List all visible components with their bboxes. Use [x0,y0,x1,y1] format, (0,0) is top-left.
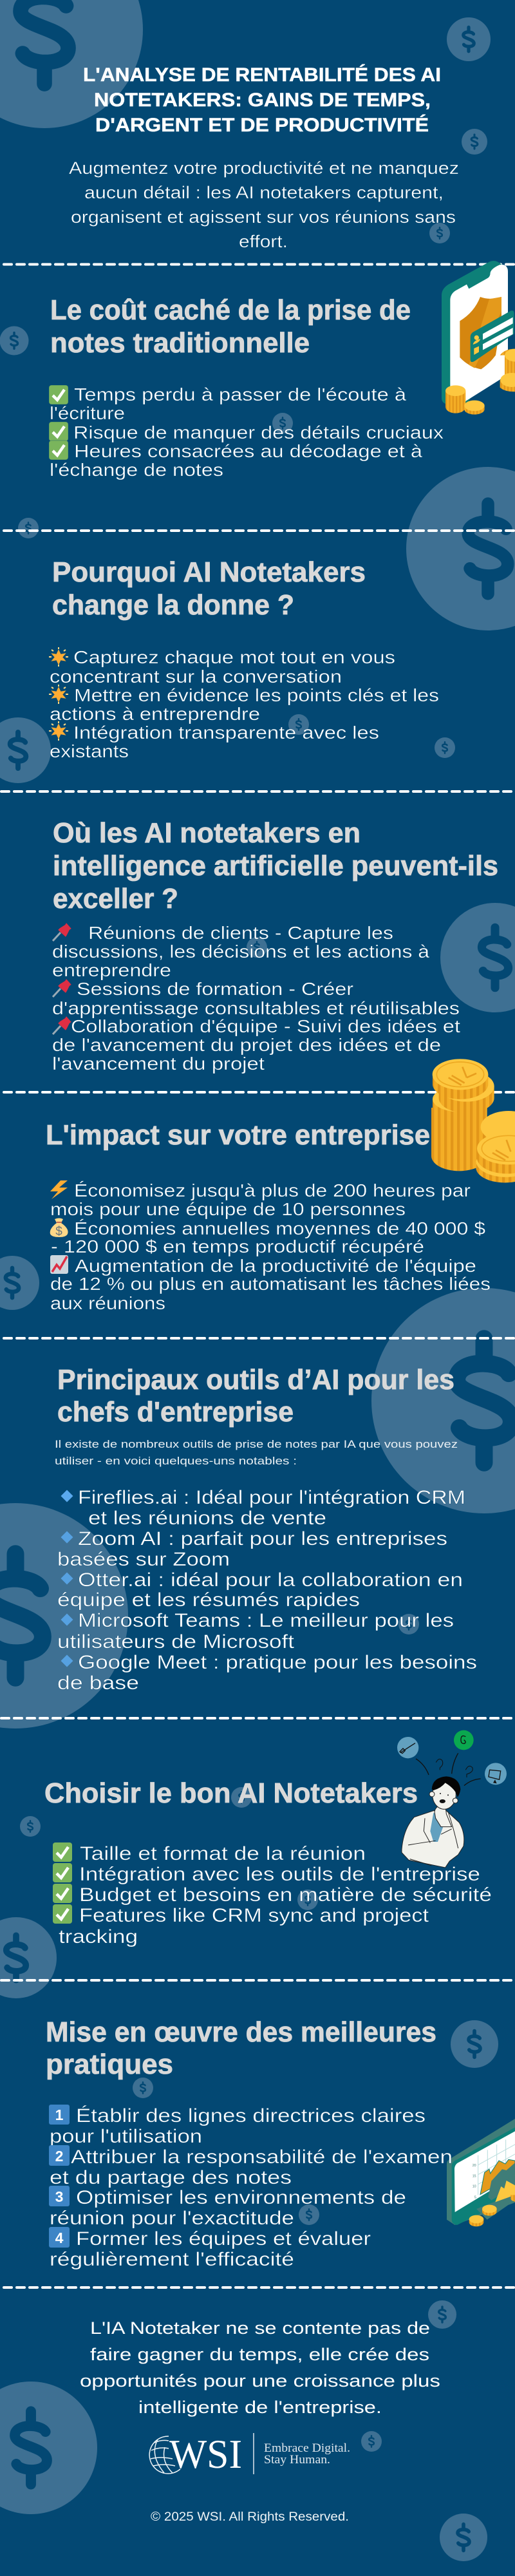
section 4 list: - 120 000 $ en temps productif récupéré [51,1236,424,1256]
section 5 list: et les réunions de vente [88,1508,326,1529]
section 2 list: existants [50,741,129,761]
section 5 intro: utiliser - en voici quelques-uns notables : [55,1455,297,1467]
closing statement: L'IA Notetaker ne se contente pas de [90,2318,430,2338]
section 4 list: Augmentation de la productivité de l'équipe [75,1256,476,1276]
section 7 list: Optimiser les environnements de [76,2187,406,2208]
subtitle: organisent et agissent sur vos réunions sans [71,207,456,227]
section 5 list: de base [57,1672,139,1694]
section 7 list: pour l'utilisation [50,2126,202,2147]
logo tagline: Stay Human. [264,2453,330,2467]
logo tagline [264,2441,350,2467]
section 3 list: Réunions de clients - Capture les [88,923,393,943]
illustration: monitor with chart: 20 [473,2164,476,2168]
section 3 heading [53,817,498,914]
WSI logo [149,2431,350,2477]
section 6 list [53,1842,492,1947]
section 5 list [57,1487,477,1694]
illustration: monitor with chart: 10 [473,2184,476,2188]
icon: keycap 4 [49,2227,70,2248]
section 2 list: Intégration transparente avec les [73,723,379,743]
section 3 list: d'apprentissage consultables et réutilisables [52,998,460,1018]
closing statement: intelligente de l'entreprise. [138,2398,382,2417]
icon: money bag [50,1218,68,1238]
icon: money bag: $ [55,1225,62,1238]
closing statement [80,2318,440,2417]
section 3 heading: Où les AI notetakers en [53,817,360,849]
section 1 heading: notes traditionnelle [50,327,310,359]
section 1 heading [50,294,411,359]
section 5 list: Google Meet : pratique pour les besoins [78,1652,477,1673]
section 1 list [49,384,444,480]
section 7 list: Attribuer la responsabilité de l'examen [71,2146,453,2168]
illustration: monitor with chart [447,2119,515,2226]
copyright: © 2025 WSI. All Rights Reserved. [151,2510,349,2524]
section 4 list [50,1180,491,1313]
section 3 list: entreprendre [52,960,171,980]
section 2 list: concentrant sur la conversation [50,667,342,687]
illustration: monitor with chart: 15 [473,2175,476,2179]
illustration: phone with shield and coins [442,261,515,415]
icon: keycap 1: 1 [55,2107,64,2123]
section 6 list: Taille et format de la réunion [80,1843,366,1864]
section 3 list: discussions, les décisions et les actions à [52,942,429,961]
section 4 list: mois pour une équipe de 10 personnes [50,1199,406,1219]
section 5 list: Fireflies.ai : Idéal pour l'intégration CRM [78,1487,465,1508]
section 3 list [52,923,460,1074]
section 7 heading: Mise en œuvre des meilleures [46,2016,436,2048]
section 3 heading: exceller ? [53,883,178,914]
section 6 list: Intégration avec les outils de l'entreprise [79,1864,480,1885]
section 2 list [49,647,439,761]
illustration: gold coin stacks [431,1059,515,1182]
icon: keycap 2: 2 [55,2148,63,2164]
section 7 list: Former les équipes et évaluer [76,2228,371,2249]
icon: keycap 2 [49,2145,70,2166]
section 6 list: Features like CRM sync and project [79,1905,429,1926]
section 2 list: Mettre en évidence les points clés et les [74,685,439,705]
section 4 list: Économies annuelles moyennes de 40 000 $ [74,1218,485,1238]
icon: keycap 3: 3 [55,2188,63,2205]
section 5 list: Otter.ai : idéal pour la collaboration en [78,1569,463,1591]
illustration: thinking man [397,1730,507,1868]
subtitle: aucun détail : les AI notetakers capturent, [84,183,444,202]
icon: rising chart [50,1255,68,1274]
icon: keycap 3 [49,2186,70,2206]
section 7 list: Établir des lignes directrices claires [76,2105,426,2126]
section 2 heading [52,556,366,621]
section 3 list: l'avancement du projet [52,1054,265,1074]
logo wordmark: WSI [169,2431,242,2477]
section 5 heading: chefs d'entreprise [57,1396,294,1428]
section 6 list: tracking [59,1926,138,1947]
section 4 list: Économisez jusqu'à plus de 200 heures par [74,1180,471,1200]
section 7 list: et du partage des notes [50,2167,292,2188]
section 5 heading: Principaux outils d’AI pour les [57,1364,454,1396]
icon: keycap 4: 4 [55,2230,64,2246]
section 7 list [49,2105,453,2270]
section 4 list: aux réunions [50,1293,165,1313]
subtitle: Augmentez votre productivité et ne manquez [69,158,459,178]
section 1 list: Risque de manquer des détails cruciaux [73,422,444,442]
section 5 intro: Il existe de nombreux outils de prise de notes par IA que vous pouvez [55,1438,458,1450]
logo tagline: Embrace Digital. [264,2441,350,2455]
title: NOTETAKERS: GAINS DE TEMPS, [94,90,431,111]
section 2 list: Capturez chaque mot tout en vous [73,647,395,667]
section 7 heading [46,2016,436,2080]
section 1 list: l'écriture [50,403,125,423]
section 1 heading: Le coût caché de la prise de [50,294,411,326]
section 4 list: de 12 % ou plus en automatisant les tâches liées [50,1274,491,1294]
section 6 list: Budget et besoins en matière de sécurité [79,1884,492,1906]
section 7 list: régulièrement l'efficacité [50,2249,294,2270]
subtitle [69,158,459,251]
section 1 list: l'échange de notes [50,460,223,480]
icon: lightning [50,1180,68,1199]
section 3 list: de l'avancement du projet des idées et de [52,1035,441,1055]
closing statement: opportunités pour une croissance plus [80,2371,440,2391]
section 5 list: Microsoft Teams : Le meilleur pour les [78,1610,454,1631]
section 5 list: basées sur Zoom [57,1549,230,1570]
section 5 list: utilisateurs de Microsoft [57,1631,295,1653]
illustration: monitor with chart: 5 [474,2195,476,2199]
title [83,64,441,136]
logo globe [149,2436,180,2474]
title: L'ANALYSE DE RENTABILITÉ DES AI [83,64,441,86]
section 1 list: Heures consacrées au décodage et à [74,441,422,461]
icon: keycap 1 [49,2105,70,2125]
section 5 intro [55,1438,458,1467]
section 5 list: équipe et les résumés rapides [57,1589,360,1611]
section 6 heading: Choisir le bon AI Notetakers [44,1777,418,1809]
section 7 list: réunion pour l'exactitude [50,2208,294,2229]
section 1 list: Temps perdu à passer de l'écoute à [74,384,406,404]
section 2 heading: change la donne ? [52,589,294,621]
closing statement: faire gagner du temps, elle crée des [90,2345,429,2364]
subtitle: effort. [239,232,288,251]
section 4 heading: L'impact sur votre entreprise [46,1119,430,1151]
section 7 heading: pratiques [46,2049,173,2080]
section 5 heading [57,1364,454,1428]
section 5 list: Zoom AI : parfait pour les entreprises [78,1528,447,1549]
section 2 heading: Pourquoi AI Notetakers [52,556,366,588]
section 3 list: Collaboration d'équipe - Suivi des idées et [71,1016,460,1036]
title: D'ARGENT ET DE PRODUCTIVITÉ [95,114,429,136]
section 3 heading: intelligence artificielle peuvent-ils [53,850,498,882]
section 2 list: actions à entreprendre [50,704,260,724]
section 3 list: Sessions de formation - Créer [77,979,353,999]
